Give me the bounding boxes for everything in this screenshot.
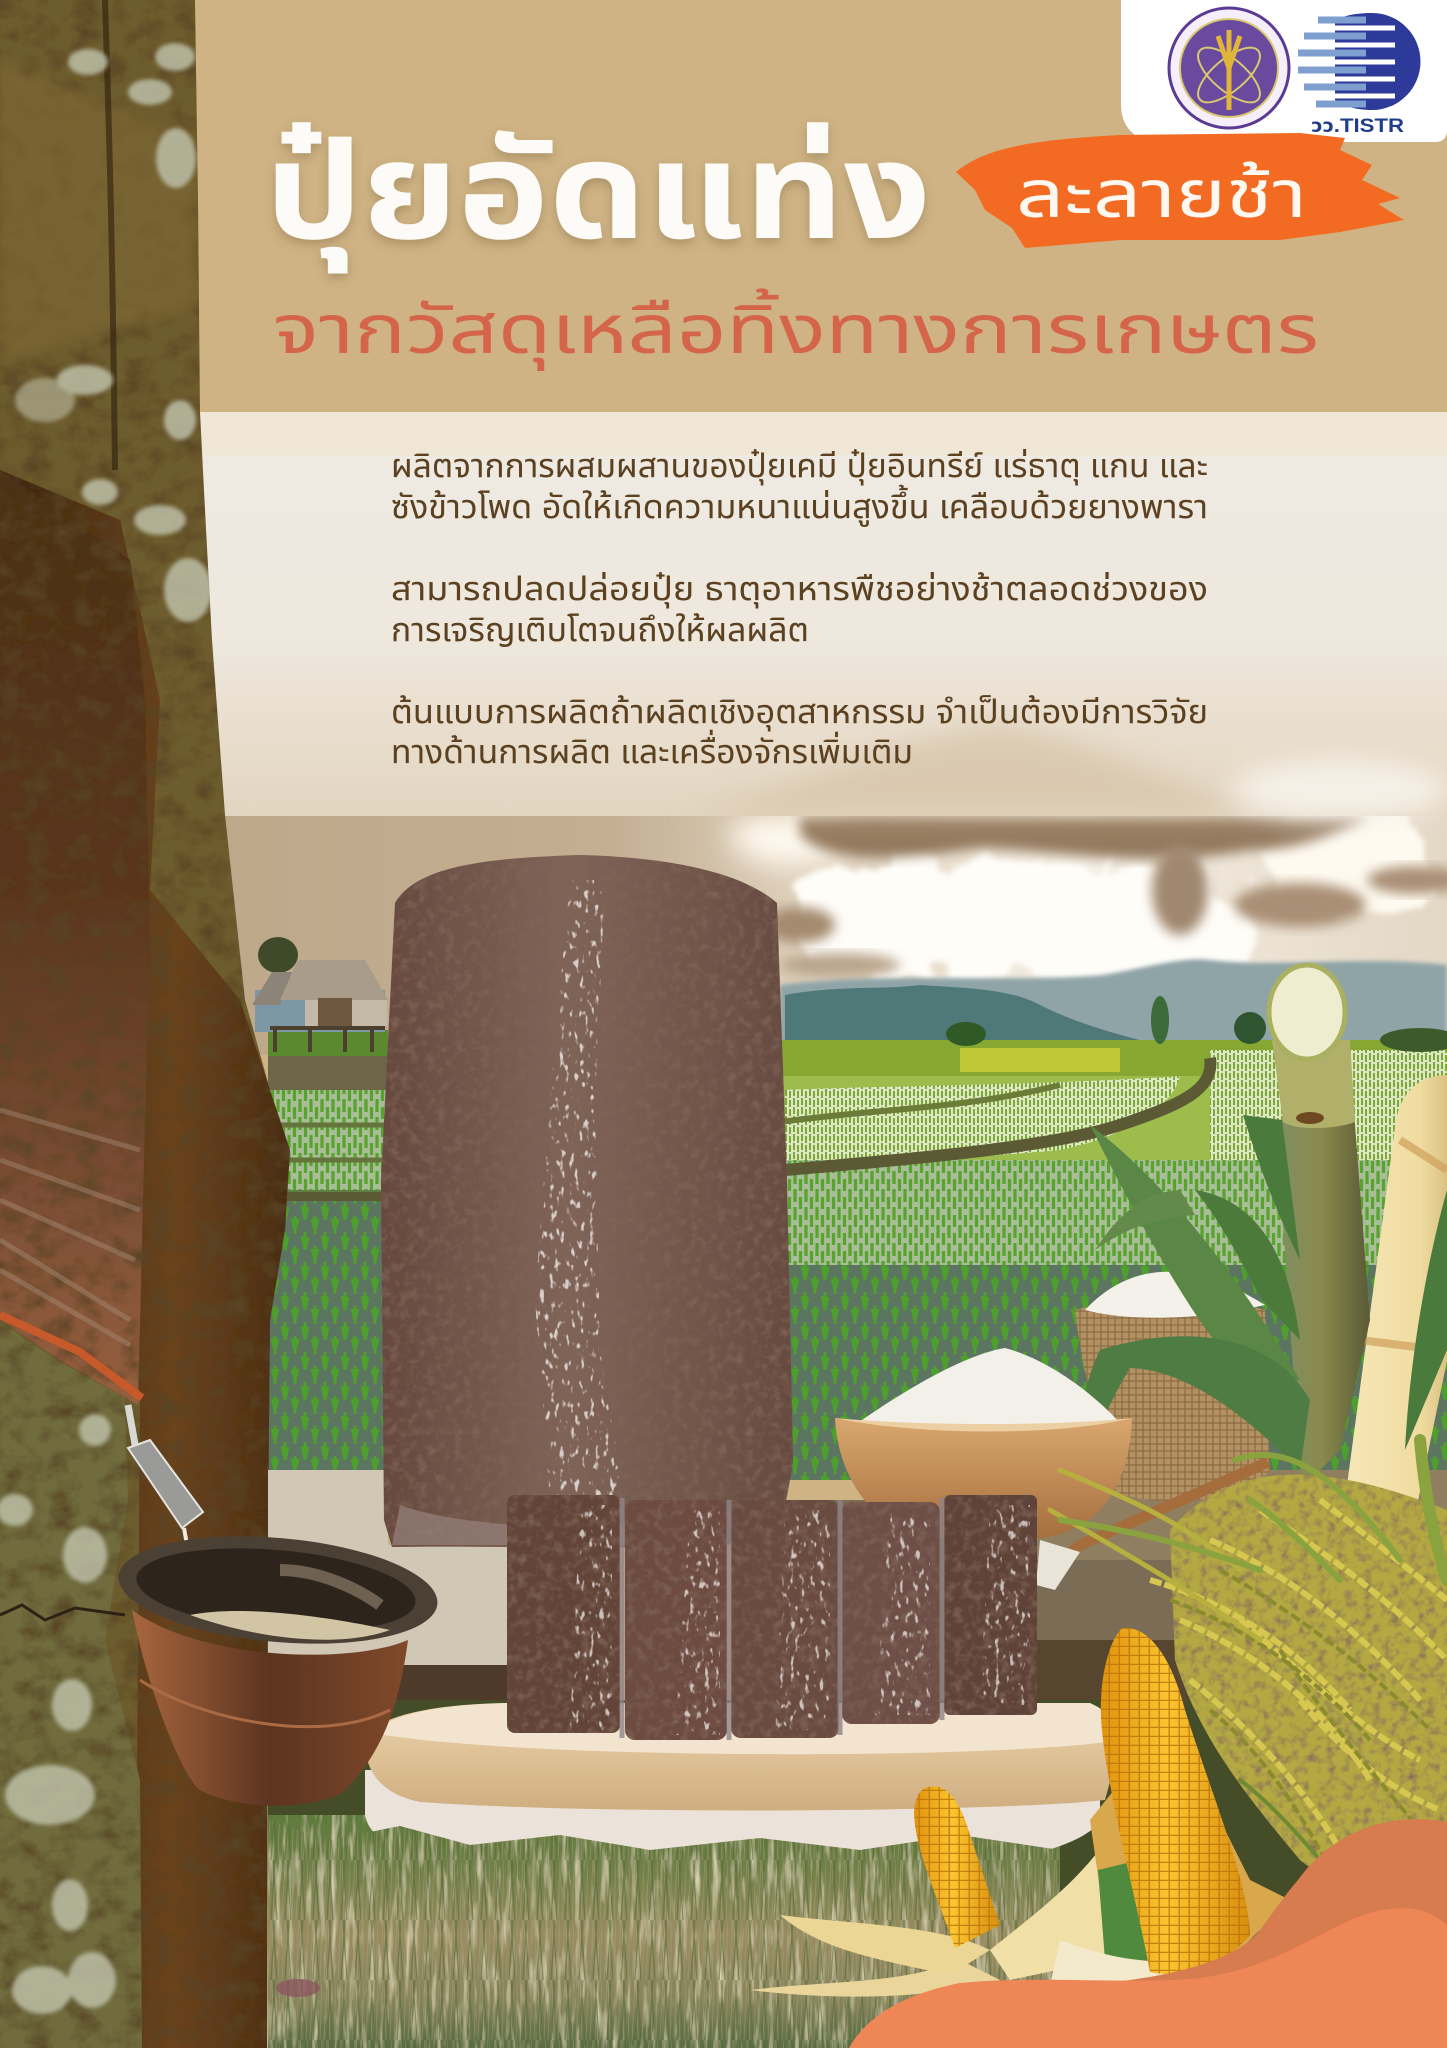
- subtitle: from agricultural waste: จากวัสดุเหลือทิ้งทางการเกษตร: [273, 288, 1319, 371]
- icon: rice sack: [1075, 1272, 1270, 1501]
- ground behind foreground: [268, 1700, 1447, 2048]
- badge text: slow release: ละลายช้า: [1016, 157, 1307, 231]
- icon: farm hut: [252, 937, 388, 1052]
- panel: description background: [200, 412, 1447, 820]
- bark flap edge: [0, 1315, 142, 1398]
- scene: sky and mountains: [198, 805, 1447, 1055]
- icon: wire around tree: [0, 1605, 125, 1620]
- icon: ministry seal: [1169, 8, 1289, 128]
- table top wood: [268, 1470, 1447, 1705]
- tree trunk: [0, 0, 300, 2048]
- icon: corn cobs and husks: [750, 1628, 1290, 1997]
- dark lower bark: [0, 470, 290, 2048]
- icon: latex spout: [128, 1405, 203, 1545]
- bark flap: [0, 470, 150, 1405]
- logo panel: [1121, 0, 1447, 142]
- text block: paragraph 2: [391, 570, 1208, 648]
- small fertilizer briquettes: [507, 1495, 1037, 1740]
- icon: rice stalks: [1050, 1440, 1447, 1890]
- icon: sugarcane: [1269, 965, 1447, 1530]
- panel: header tan band: [198, 0, 1447, 412]
- grass behind podium: [268, 1815, 1060, 2048]
- plastic wrap highlights: [535, 880, 625, 1500]
- decorative orange wave: [849, 1819, 1447, 2048]
- big fertilizer briquette: [381, 855, 793, 1548]
- text block: paragraph 1: ผลิตจากการผสมผสานของปุ๋ยเคมี ปุ๋ยอินทรีย์ แร่ธาตุ แกน และ: [391, 447, 1208, 486]
- icon: cup for latex: [114, 1524, 442, 1806]
- icon: rice in wooden bowl: [835, 1348, 1132, 1538]
- title: main heading: ปุ๋ยอัดแท่ง: [265, 115, 931, 273]
- podium wood and base: [365, 1703, 1120, 1885]
- text block: paragraph 3: ทางด้านการผลิต และเครื่องจักรเพิ่มเติม: [391, 729, 913, 770]
- text block: paragraph 2: การเจริญเติบโตจนถึงให้ผลผลิต: [391, 611, 809, 648]
- icon: orange brush stroke: [956, 133, 1404, 248]
- grass foreground: [268, 1820, 1060, 2048]
- text block: paragraph 1: ซังข้าวโพด อัดให้เกิดความหนาแน่นสูงขึ้น เคลือบด้วยยางพารา: [391, 484, 1208, 527]
- text block: paragraph 1: [391, 447, 1208, 527]
- icon: green leaves: [1072, 1115, 1447, 1482]
- logo wordmark: วว.TISTR: [1311, 116, 1404, 137]
- mossy lower trunk: [0, 1322, 142, 2048]
- scene: rice field: [268, 996, 1447, 1480]
- text block: paragraph 3: ต้นแบบการผลิตถ้าผลิตเชิงอุตสาหกรรม จำเป็นต้องมีการวิจัย: [391, 693, 1208, 732]
- text block: paragraph 2: สามารถปลดปล่อยปุ๋ย ธาตุอาหารพืชอย่างช้าตลอดช่วงของ: [391, 570, 1208, 609]
- icon: wooden spoon: [1036, 1462, 1268, 1590]
- text block: paragraph 3: [391, 693, 1208, 770]
- icon: TISTR logo: [1292, 13, 1420, 137]
